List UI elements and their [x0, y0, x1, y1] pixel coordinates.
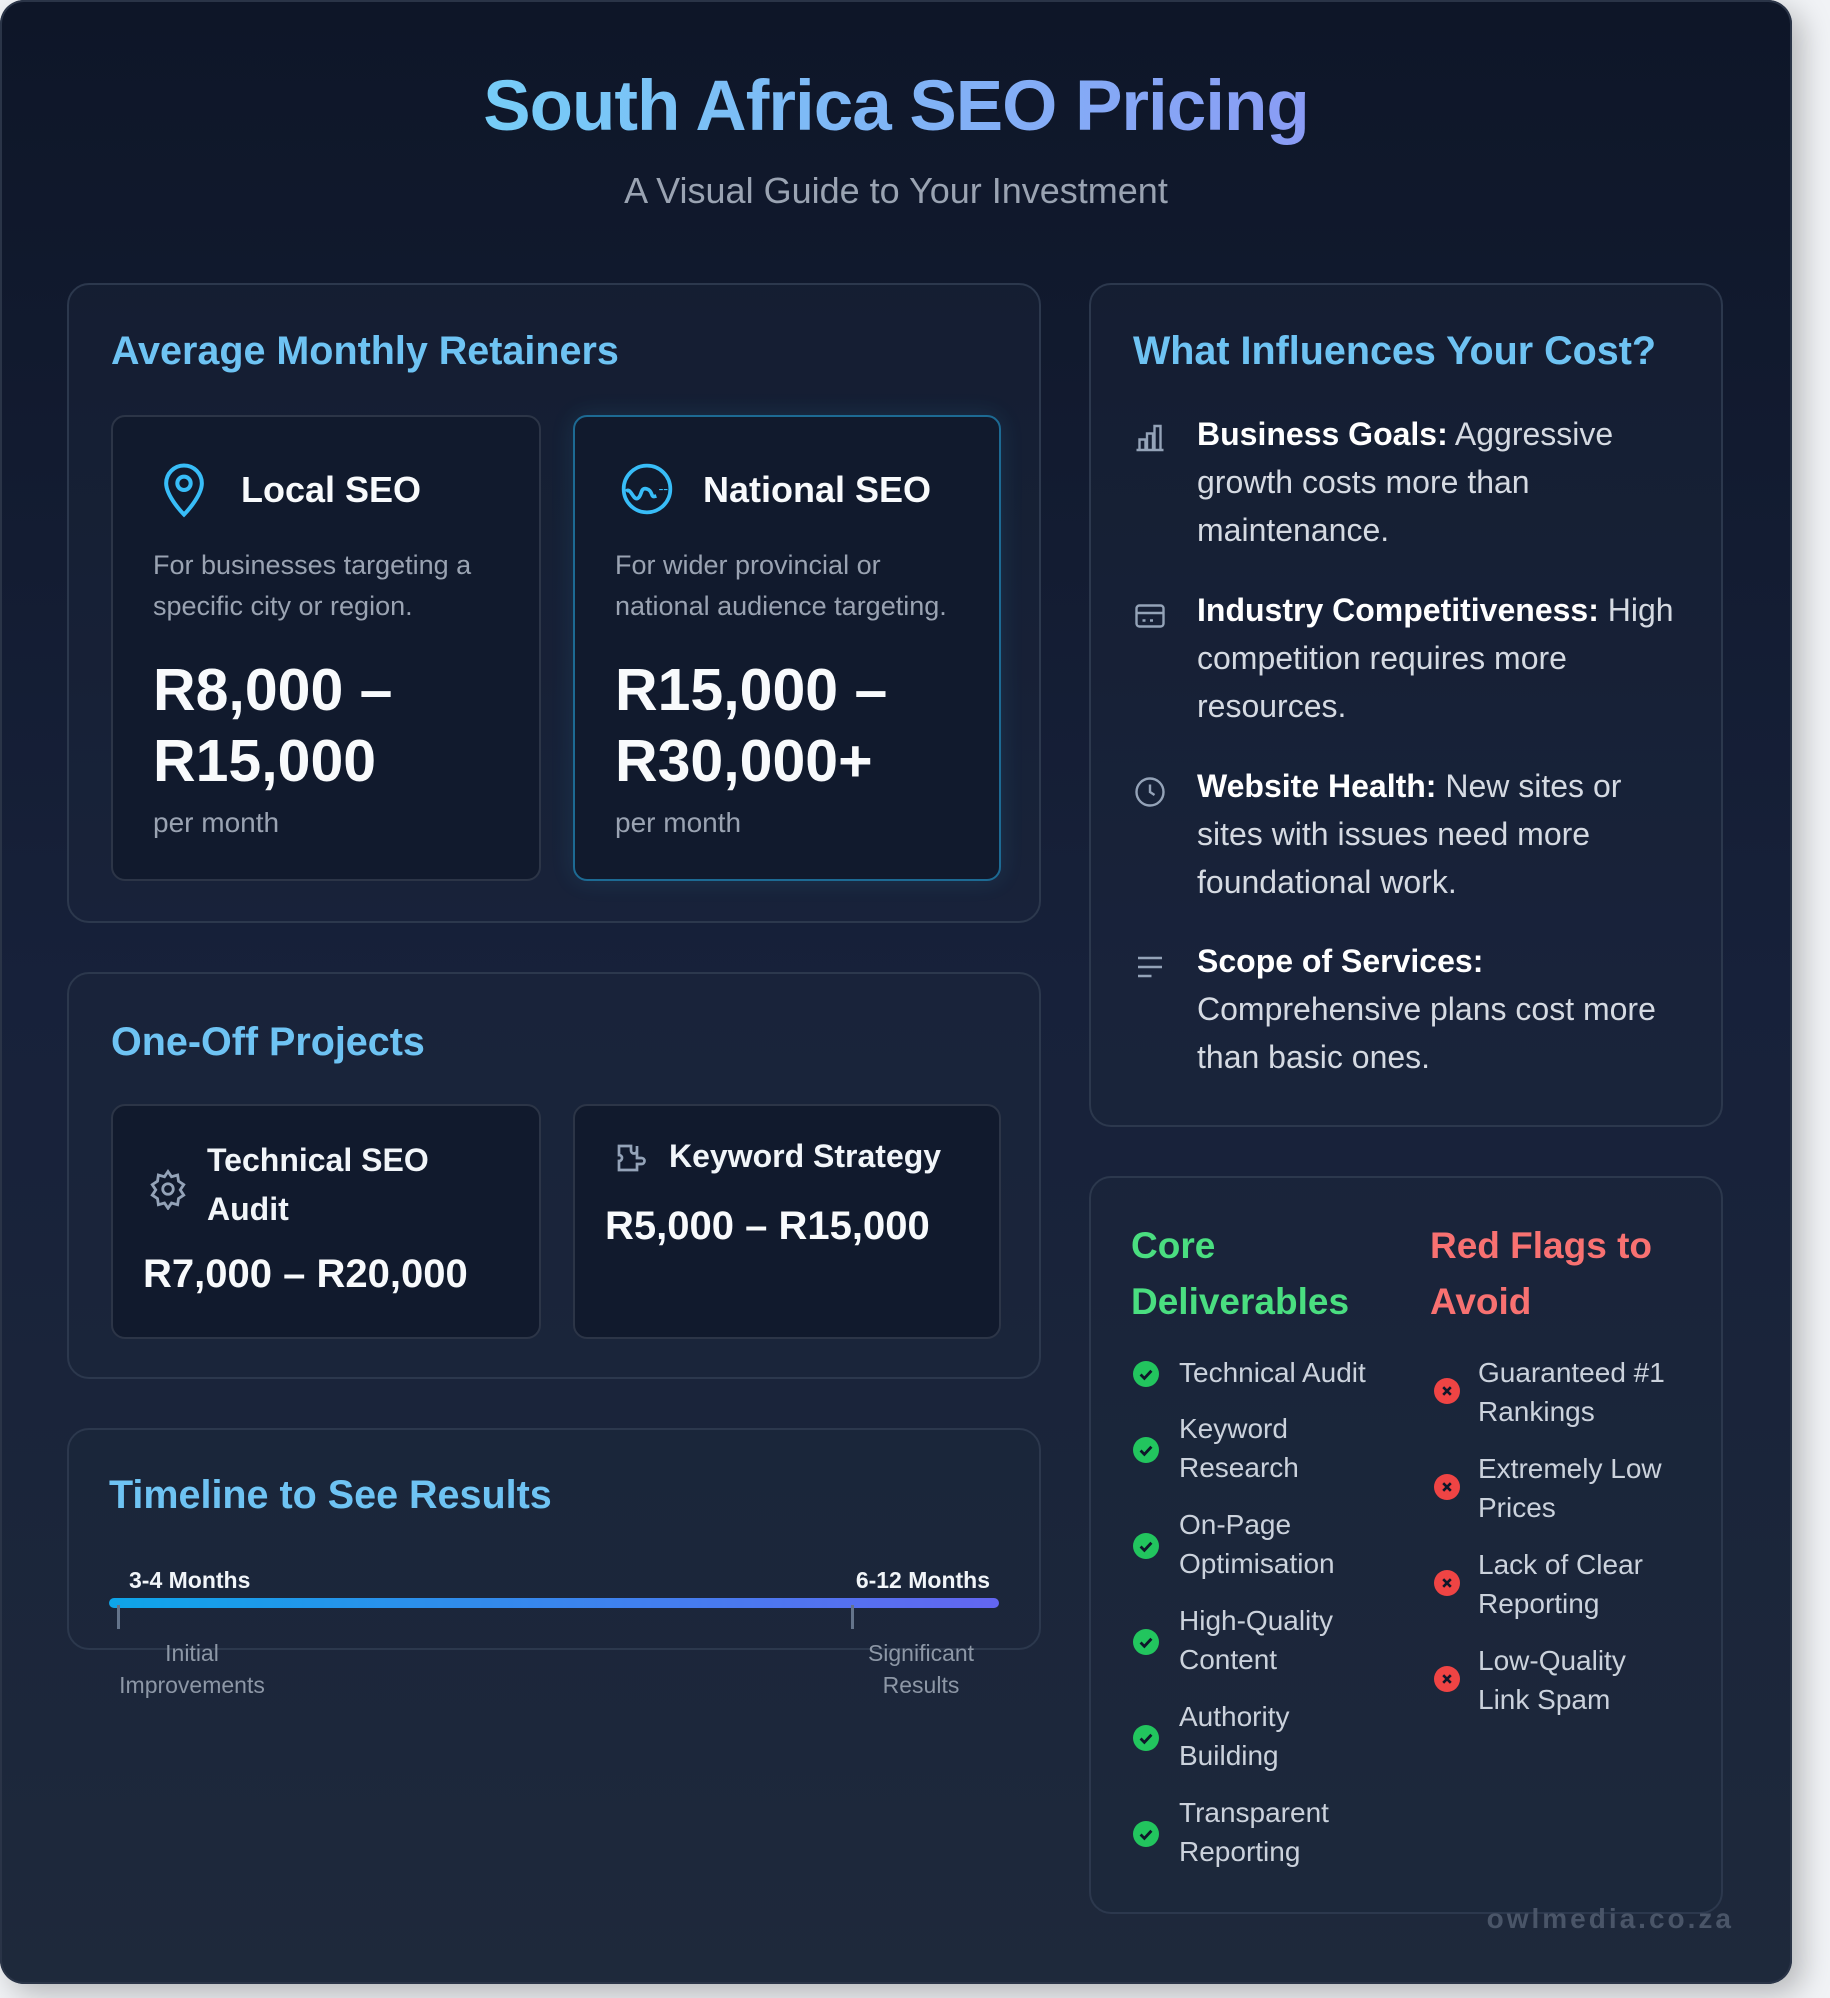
list: Guaranteed #1: [1478, 1357, 1665, 1388]
icon: pin: [164, 464, 204, 518]
card: national seo: National SEO: [703, 469, 931, 510]
red flags column: Red Flags to: [1430, 1225, 1652, 1266]
heading: What Influences Your Cost?: [1133, 329, 1656, 373]
item: business goals: Business Goals: Aggressive growth costs more than maintenance.: [1197, 416, 1613, 548]
card: keyword strategy: Keyword Strategy: [669, 1138, 941, 1174]
list: Technical Audit: [1179, 1357, 1366, 1388]
list: Authority: [1179, 1701, 1290, 1732]
card: technical audit: R7,000 – R20,000: [143, 1252, 468, 1296]
card: technical audit: Technical SEO: [207, 1142, 429, 1178]
list: Keyword: [1179, 1413, 1288, 1444]
list: Link Spam: [1478, 1684, 1610, 1715]
panel: one-off projects: [67, 972, 1041, 1379]
card: technical audit: [111, 1104, 541, 1339]
card: local seo: per month: [153, 807, 279, 838]
timeline heading: Timeline to See Results: [109, 1473, 552, 1517]
heading: Average Monthly Retainers: [111, 329, 619, 373]
red flags column: [1430, 1225, 1665, 1715]
list: Optimisation: [1179, 1548, 1335, 1579]
panel: monthly retainers: [67, 283, 1041, 923]
list: Prices: [1478, 1492, 1556, 1523]
panel: timeline: [67, 1428, 1041, 1650]
title: South Africa SEO Pricing: [483, 67, 1309, 146]
list: Transparent: [1179, 1797, 1329, 1828]
icon: globe: [622, 464, 672, 514]
list: High-Quality: [1179, 1605, 1333, 1636]
timeline chart: Improvements: [119, 1672, 265, 1698]
panel: influences: [1089, 283, 1723, 1127]
card: local seo: For businesses targeting a specific city or region.: [153, 550, 471, 621]
timeline chart: 3-4 Months: [129, 1567, 250, 1593]
card: local seo: R15,000: [153, 728, 376, 794]
heading: One-Off Projects: [111, 1020, 425, 1064]
timeline chart: Initial: [165, 1640, 219, 1666]
list: Reporting: [1179, 1836, 1300, 1867]
timeline chart: 6-12 Months: [856, 1567, 990, 1593]
timeline chart: Significant: [868, 1640, 974, 1666]
item: website health: Website Health: New sites or sites with issues need more foundational work.: [1197, 768, 1621, 900]
list: On-Page: [1179, 1509, 1291, 1540]
card: national seo: [573, 415, 1001, 881]
card: national seo: R15,000 –: [615, 657, 887, 723]
card: national seo: per month: [615, 807, 741, 838]
timeline chart: [109, 1567, 999, 1698]
card: keyword strategy: [573, 1104, 1001, 1339]
list: Extremely Low: [1478, 1453, 1662, 1484]
card: local seo: [111, 415, 541, 881]
red flags column: Avoid: [1430, 1281, 1531, 1322]
list: Research: [1179, 1452, 1299, 1483]
item: competitiveness: Industry Competitiveness: High competition requires more resources.: [1197, 592, 1674, 724]
list: Building: [1179, 1740, 1279, 1771]
icon: puzzle: [618, 1144, 646, 1172]
list: [1133, 1357, 1366, 1867]
card: technical audit: Audit: [207, 1191, 289, 1227]
list: Lack of Clear: [1478, 1549, 1643, 1580]
icon: gear: [150, 1169, 186, 1210]
list: Rankings: [1478, 1396, 1595, 1427]
core deliverables column: Deliverables: [1131, 1281, 1349, 1322]
card: local seo: Local SEO: [241, 469, 421, 510]
item: scope: Scope of Services: Comprehensive plans cost more than basic ones.: [1197, 943, 1656, 1075]
card: national seo: R30,000+: [615, 728, 873, 794]
card: keyword strategy: R5,000 – R15,000: [605, 1204, 930, 1248]
core deliverables column: [1131, 1225, 1366, 1867]
core deliverables column: Core: [1131, 1225, 1215, 1266]
list: Low-Quality: [1478, 1645, 1626, 1676]
subtitle: A Visual Guide to Your Investment: [624, 170, 1168, 211]
panel: deliverables & red flags: [1089, 1176, 1723, 1914]
card: local seo: R8,000 –: [153, 657, 392, 723]
list: Reporting: [1478, 1588, 1599, 1619]
watermark: owlmedia.co.za: [1487, 1903, 1734, 1934]
card: national seo: For wider provincial or national audience targeting.: [615, 550, 947, 621]
list: [1434, 1357, 1665, 1715]
list: Content: [1179, 1644, 1277, 1675]
timeline chart: Results: [883, 1672, 959, 1698]
